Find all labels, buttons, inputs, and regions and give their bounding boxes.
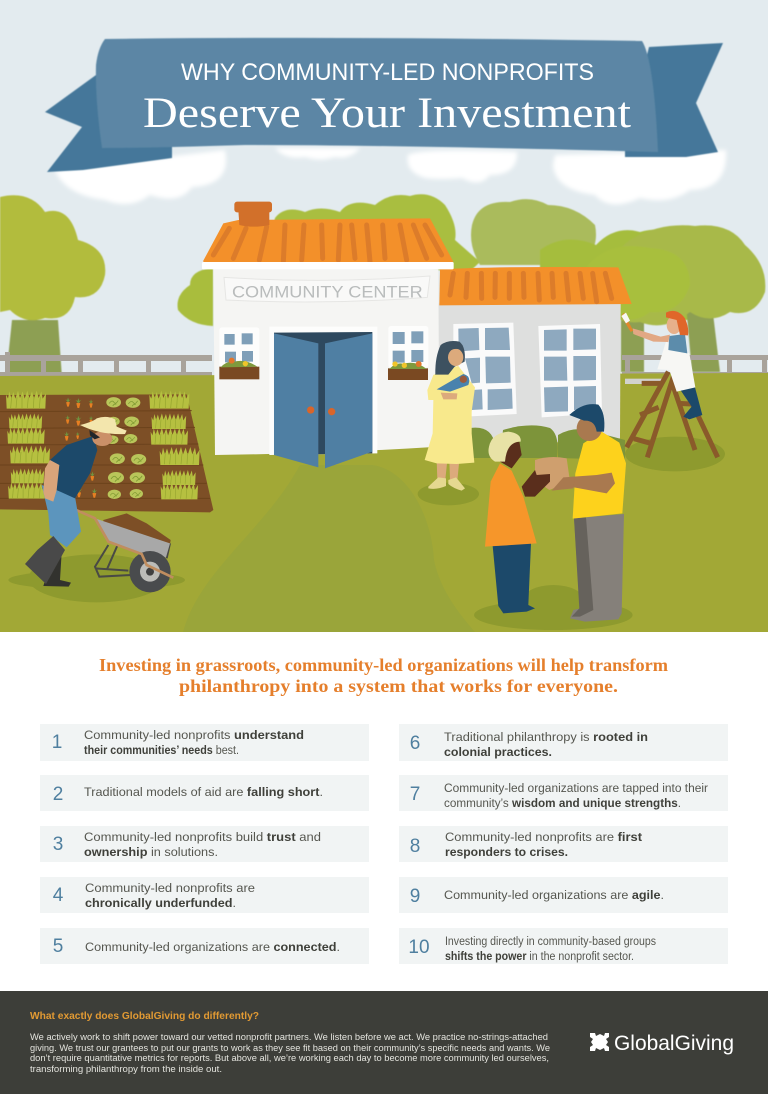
GlobalGiving logo: GlobalGiving xyxy=(614,1032,734,1055)
annex window left xyxy=(453,323,517,417)
subheading xyxy=(99,655,668,696)
footer heading: What exactly does GlobalGiving do differently? xyxy=(30,1011,259,1022)
ribbon tail left xyxy=(45,75,172,172)
box xyxy=(535,457,570,490)
list item 3: Community-led nonprofits build trust and xyxy=(84,830,321,844)
subheading: Investing in grassroots, community-led organizations will help transform xyxy=(99,655,668,675)
ribbon body xyxy=(96,38,658,152)
footer body text xyxy=(30,1032,550,1074)
ground shadow: pair xyxy=(474,600,633,630)
list item 10: Investing directly in community-based groups xyxy=(445,934,656,948)
banner: community center xyxy=(224,276,430,302)
farmer xyxy=(25,417,127,587)
carrots xyxy=(64,398,97,498)
tree: behind house xyxy=(270,194,480,275)
lawn xyxy=(0,373,768,632)
sky background xyxy=(0,0,768,380)
man with yellow shirt xyxy=(552,404,626,622)
eave xyxy=(202,262,454,269)
footer panel xyxy=(0,991,768,1094)
list item 2: Traditional models of aid are falling short. xyxy=(84,785,323,799)
cabbages xyxy=(106,397,146,499)
window left xyxy=(219,327,259,379)
list item 8: 8 xyxy=(410,836,420,857)
list item 8: Community-led nonprofits are first xyxy=(445,830,642,844)
footer body text: transforming philanthropy from the inside out. xyxy=(30,1064,222,1074)
tree: green behind annex xyxy=(540,230,690,320)
list item 4 xyxy=(40,877,369,913)
list item 7 xyxy=(399,775,728,811)
title: Deserve Your Investment xyxy=(143,90,631,137)
footer body text: We actively work to shift power toward our vetted nonprofit partners. We listen before we act. We practice no-strings-attached xyxy=(30,1032,548,1042)
tree: right trunks xyxy=(621,300,644,372)
list item 6: colonial practices. xyxy=(444,745,552,759)
list item 7: 7 xyxy=(410,784,420,805)
clouds xyxy=(55,148,726,204)
list item 4: Community-led nonprofits are xyxy=(85,881,255,895)
tree: sage xyxy=(471,199,596,265)
banner ribbon xyxy=(45,38,723,172)
list item 6 xyxy=(399,724,728,761)
tree: right canopy xyxy=(600,225,765,325)
list item 9: Community-led organizations are agile. xyxy=(444,888,664,902)
fence xyxy=(0,352,768,388)
list item 8: responders to crises. xyxy=(445,845,568,859)
list item 3: 3 xyxy=(53,834,63,855)
trees: back row xyxy=(0,194,765,378)
list item 9 xyxy=(399,877,728,913)
vegetable plot xyxy=(0,391,213,512)
list item 5: 5 xyxy=(53,936,63,957)
community center building xyxy=(202,202,632,468)
tree: small left of house xyxy=(178,268,213,326)
list item 5 xyxy=(40,928,369,964)
painter on ladder xyxy=(621,311,725,471)
shadow xyxy=(8,554,185,602)
list item 10: 10 xyxy=(408,937,430,958)
farmer and wheelbarrow xyxy=(8,417,185,602)
list item 4: chronically underfunded . xyxy=(85,896,236,910)
man hand xyxy=(552,477,575,491)
window right xyxy=(388,326,428,380)
door xyxy=(269,327,377,468)
list item 3 xyxy=(40,826,369,862)
tree: left canopy xyxy=(6,320,62,378)
people and objects xyxy=(418,311,725,630)
list item 1: their communities’ needs best. xyxy=(84,743,239,757)
list item 3: ownership in solutions. xyxy=(84,845,218,859)
white content area xyxy=(0,632,768,991)
annex window right xyxy=(538,324,602,417)
list item 2 xyxy=(40,775,369,811)
list item 6: Traditional philanthropy is rooted in xyxy=(444,730,648,744)
bushes xyxy=(470,425,625,460)
footer body text: don’t require quantitative metrics for reports. But above all, we’re working each day to become more community led ourselves, xyxy=(30,1053,549,1063)
banner: community center: COMMUNITY CENTER xyxy=(232,282,423,301)
grass rows: left xyxy=(6,391,50,499)
person with orange shirt xyxy=(485,432,550,613)
annex roof xyxy=(439,267,632,305)
annex wall xyxy=(437,303,621,450)
list item 2: 2 xyxy=(53,784,63,805)
title xyxy=(143,59,631,137)
wheelbarrow xyxy=(53,500,173,592)
main wall xyxy=(213,269,439,455)
list item 1: 1 xyxy=(52,732,62,753)
lawn path xyxy=(183,465,475,632)
main roof xyxy=(203,218,453,263)
ribbon tail right xyxy=(625,43,723,157)
list item 7: community’s wisdom and unique strengths. xyxy=(444,796,681,810)
subheading: philanthropy into a system that works for everyone. xyxy=(179,676,618,696)
list item 10: shifts the power in the nonprofit sector. xyxy=(445,949,634,963)
list item 4: 4 xyxy=(53,885,64,906)
woman holding baby xyxy=(418,341,479,505)
list item 10 xyxy=(399,928,728,964)
grass rows: right xyxy=(149,391,200,499)
list item 9: 9 xyxy=(410,886,420,907)
chimney xyxy=(234,202,272,227)
list item 6: 6 xyxy=(410,733,420,754)
list item 5: Community-led organizations are connected. xyxy=(85,940,340,954)
title: WHY COMMUNITY-LED NONPROFITS xyxy=(181,59,594,86)
list item 8 xyxy=(399,826,728,862)
list item 7: Community-led organizations are tapped into their xyxy=(444,781,708,795)
footer body text: giving. We trust our grantees to put our grants to work as they see fit based on their community’s specific needs and wants. We xyxy=(30,1043,550,1053)
list item 1: Community-led nonprofits understand xyxy=(84,728,304,742)
list item 1 xyxy=(40,724,369,761)
